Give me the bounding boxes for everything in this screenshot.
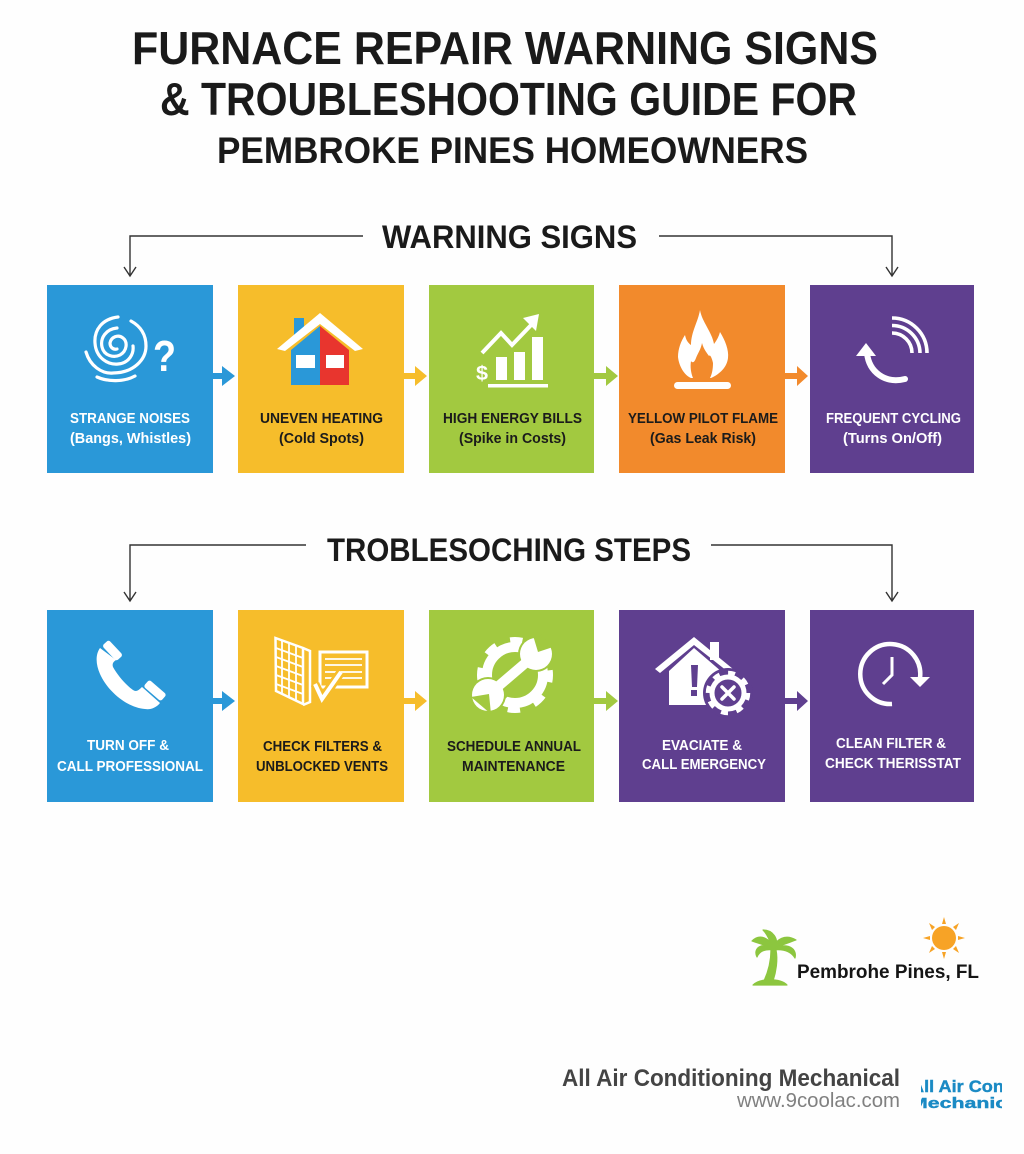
label: turn off and call	[57, 738, 203, 775]
location text: Pembrohe Pines, FL	[797, 962, 979, 983]
label: strange noises: STRANGE NOISES	[70, 411, 190, 427]
bracket arrow: warning signs right	[659, 236, 898, 276]
label: yellow pilot flame	[628, 411, 778, 447]
label: check filters	[256, 739, 388, 775]
arrow: yellow	[403, 366, 427, 386]
arrow: blue	[212, 366, 235, 386]
panel: turn off and call	[47, 610, 213, 802]
panel: uneven heating	[238, 285, 404, 473]
label: strange noises	[70, 411, 191, 447]
logo: clipped company name: All Air Cond	[911, 1077, 1015, 1096]
bracket arrow: steps right	[711, 545, 898, 601]
panel: schedule maintenance	[429, 610, 594, 802]
label: schedule maintenance: SCHEDULE ANNUAL	[447, 739, 581, 755]
bracket arrow: warning signs left	[124, 236, 363, 276]
label: frequent cycling: FREQUENT CYCLING	[826, 411, 961, 427]
label: strange noises: (Bangs, Whistles)	[70, 431, 191, 447]
icon: spiral noise with question mark	[86, 317, 176, 381]
label: turn off and call: TURN OFF &	[87, 738, 169, 754]
label: high energy bills: HIGH ENERGY BILLS	[443, 411, 582, 427]
title	[132, 22, 878, 171]
heading: warning signs: WARNING SIGNS	[382, 219, 637, 255]
panel: high energy bills	[429, 285, 594, 473]
footer: company	[562, 1065, 900, 1112]
arrow: yellow	[403, 691, 427, 711]
arrow: orange	[785, 366, 808, 386]
arrow: purple	[785, 691, 808, 711]
label: clean filter	[825, 736, 961, 772]
arrow: green	[594, 366, 618, 386]
label: uneven heating	[260, 411, 383, 447]
icon: phone	[97, 640, 167, 709]
icon: cycle arrow with waves	[856, 318, 927, 380]
label: schedule maintenance	[447, 739, 581, 775]
title: & TROUBLESHOOTING GUIDE FOR	[160, 73, 857, 125]
icon: rising bars	[476, 314, 548, 388]
label: evacuate: CALL EMERGENCY	[642, 757, 766, 773]
label: check filters: CHECK FILTERS &	[263, 739, 382, 755]
label: turn off and call: CALL PROFESSIONAL	[57, 759, 203, 775]
icon: house with alert and gear	[655, 637, 753, 718]
arrow: green	[594, 691, 618, 711]
title: PEMBROKE PINES HOMEOWNERS	[217, 130, 808, 171]
title: FURNACE REPAIR WARNING SIGNS	[132, 22, 878, 74]
location badge	[752, 917, 979, 985]
icon: two-tone house	[277, 313, 363, 385]
panel: strange noises	[47, 285, 213, 473]
footer: company: All Air Conditioning Mechanical	[562, 1065, 900, 1092]
panel: evacuate	[619, 610, 785, 802]
label: check filters: UNBLOCKED VENTS	[256, 759, 388, 775]
panel: frequent cycling	[810, 285, 974, 473]
label: yellow pilot flame: (Gas Leak Risk)	[650, 431, 756, 447]
heading: troubleshooting steps: TROBLESOCHING STEPS	[327, 532, 691, 568]
icon: spiral noise with question mark: ?	[153, 332, 176, 381]
icon: sun	[923, 917, 965, 959]
panel: check filters	[238, 610, 404, 802]
label: evacuate: EVACIATE &	[662, 738, 742, 754]
label: frequent cycling: (Turns On/Off)	[843, 431, 942, 447]
footer: company: www.9coolac.com	[736, 1090, 900, 1112]
label: uneven heating: UNEVEN HEATING	[260, 411, 383, 427]
icon: flame	[674, 310, 731, 389]
panel: yellow pilot flame	[619, 285, 785, 473]
label: clean filter: CHECK THERISSTAT	[825, 756, 961, 772]
label: yellow pilot flame: YELLOW PILOT FLAME	[628, 411, 778, 427]
icon: filter and checklist	[276, 638, 367, 705]
logo: clipped company name: Mechanical	[910, 1095, 1024, 1112]
label: high energy bills	[443, 411, 582, 447]
label: uneven heating: (Cold Spots)	[279, 431, 364, 447]
icon: palm tree	[752, 930, 796, 985]
label: high energy bills: (Spike in Costs)	[459, 431, 566, 447]
icon: gear and wrench	[470, 632, 556, 714]
label: frequent cycling	[826, 411, 961, 447]
label: evacuate	[642, 738, 766, 773]
icon: clock with arrow	[860, 644, 930, 704]
label: clean filter: CLEAN FILTER &	[836, 736, 946, 752]
bracket arrow: steps left	[124, 545, 306, 601]
label: schedule maintenance: MAINTENANCE	[462, 759, 565, 775]
panel: clean filter	[810, 610, 974, 802]
arrow: blue	[212, 691, 235, 711]
icon: rising bars: $	[476, 363, 488, 385]
logo: clipped company name	[921, 1080, 1002, 1108]
